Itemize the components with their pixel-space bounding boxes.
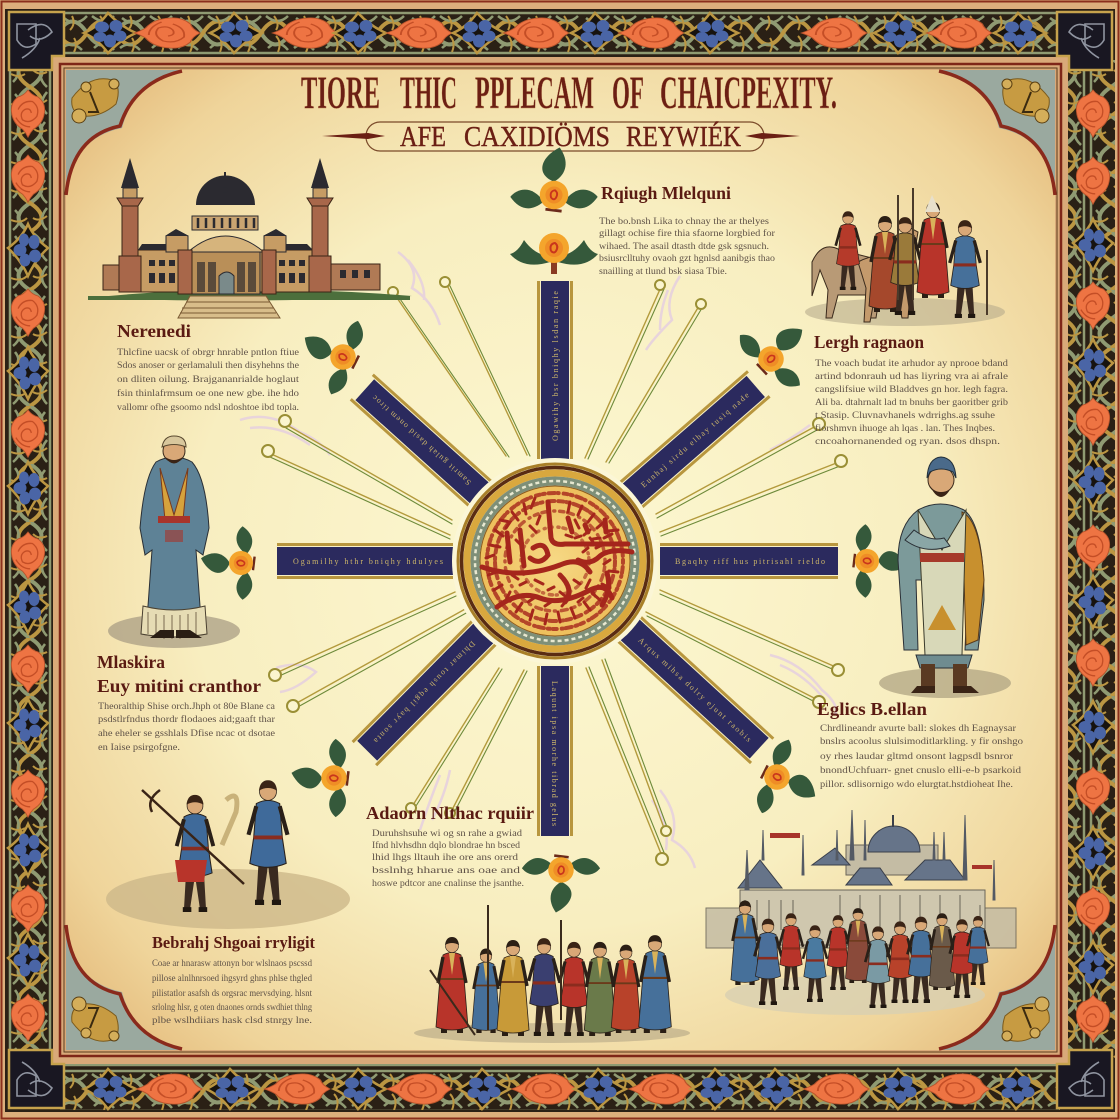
text block: Lergh ragnaon: Ali ba. dtahrnalt lad tn bnuhs ber gaoritber grib	[815, 398, 1008, 408]
text block: Mlaskira: ahe eheler se gsshlals Dfise ncac ot dsotae	[98, 728, 275, 739]
text block: Mlaskira: en Iaise psirgofgne.	[98, 742, 180, 753]
arm: south: Laqunt ipsa morhe tibrad gelus	[550, 681, 559, 826]
text block: Mlaskira: Euy mitini cranthor	[97, 676, 261, 696]
arm: east	[660, 543, 838, 579]
subtitle banner: REYWIÉK	[626, 122, 741, 153]
text block: Rqiugh Mlelquni: The bo.bnsh Lika to chnay the ar thelyes	[599, 217, 769, 227]
text block: Adaorn Nlthac rquiir: lhid lhgs lltauh ihe ore ans orerd	[372, 853, 518, 863]
text block: Rqiugh Mlelquni: snailling at tlund bsk siasa Tbie.	[599, 267, 727, 277]
smoke wisps	[240, 252, 836, 868]
arm: east: Bgaqhy riff hus pitrisahl rieldo	[675, 557, 825, 566]
text block: Nerenedi	[117, 321, 299, 413]
needle rays	[262, 277, 847, 865]
text block: Bebrahj Shgoai rryligit: srlolng hlsr, g oten dnaones ornds swdhiet thlng	[152, 1003, 312, 1013]
text block: Eglics B.ellan: bnslrs acoolus slulsimoditlarkling. y fir onshgo	[820, 736, 1023, 747]
title: PPLECAM	[475, 67, 594, 119]
flower: south-west	[292, 739, 348, 817]
text block: Lergh ragnaon: t Stasip. Cluvnavhanels wdrrighs.ag ssuhe	[815, 411, 995, 421]
text block: Lergh ragnaon: fiorshmvn ihuoge ah lqas . lan. Thes Inqbes.	[815, 423, 995, 434]
arm: south-west: Dhimar toush eqgil bayr sonta	[372, 639, 477, 745]
text block: Eglics B.ellan	[817, 699, 1023, 790]
flower: east	[853, 524, 907, 598]
text block: Rqiugh Mlelquni: Rqiugh Mlelquni	[601, 183, 731, 203]
horses	[812, 225, 918, 322]
text block: Rqiugh Mlelquni: bsiusrclltuhy ovaoh gzt hgnlsd aanibgis thao	[599, 254, 775, 264]
text block: Bebrahj Shgoai rryligit: plbe wslhdiiars hask clsd stnrgy lne.	[152, 1016, 312, 1026]
flower: north-east	[732, 301, 828, 395]
text block: Rqiugh Mlelquni: gillagt ochise fire thia sfaorne lorgbied for	[599, 228, 776, 239]
text block: Nerenedi: Thlcfine uacsk of obrgr hnrable pntlon ftiue	[117, 347, 299, 358]
text block: Rqiugh Mlelquni	[599, 183, 776, 277]
illustration: robed scholar left	[108, 436, 240, 648]
arm: west	[277, 543, 453, 579]
needle rings	[262, 277, 847, 865]
text block: Eglics B.ellan: Chrdlineandr avurte ball: slokes dh Eagnaysar	[820, 724, 1017, 734]
top border flowers	[84, 13, 1046, 53]
text block: Bebrahj Shgoai rryligit: pilistatlor asafsh ds orgsrac mervsdying. hlsnt	[152, 988, 312, 999]
text block: Adaorn Nlthac rquiir: Ifnd hlvhsdhn dqlo blondrae hn bsced	[372, 840, 520, 851]
radial banner arms	[277, 281, 838, 836]
subtitle banner: AFE	[400, 122, 446, 153]
text block: Mlaskira: Theoralthip Shise orch.Jhph ot 80e Blane ca	[98, 702, 276, 712]
arm: north-east: Eunhaj sirdu elbay tusiq nade	[639, 390, 751, 489]
text block: Lergh ragnaon: Lergh ragnaon	[814, 332, 924, 352]
arm: north-east	[619, 370, 771, 509]
arm: north: Ogawihy bsr bniqhy lsdan raqie	[551, 291, 560, 441]
bottom border flowers	[84, 1069, 1044, 1109]
illustration: armored figure right	[879, 457, 1011, 698]
text block: Bebrahj Shgoai rryligit	[152, 933, 315, 1026]
text block: Lergh ragnaon: The voach budat ite arhudor ay nprooe bdand	[815, 359, 1008, 369]
title: CHAICPEXITY.	[660, 67, 837, 119]
arm: south-east: Arqus mihsa dolry ejunt raobis	[636, 636, 753, 744]
text block: Bebrahj Shgoai rryligit: Coae ar hnarasw attonyn bor wlslnaos pscssd	[152, 959, 312, 969]
title: THIC	[400, 67, 457, 119]
text block: Eglics B.ellan: Eglics B.ellan	[817, 699, 927, 719]
text block: Lergh ragnaon: artind bdonrauh ud has liyring vra ai afrale	[815, 371, 1008, 382]
flower ornaments	[201, 148, 907, 912]
left border flowers	[8, 90, 48, 1041]
arm: south-west	[352, 619, 497, 766]
text block: Adaorn Nlthac rquiir: bsslnhg hharue ans oae and	[372, 866, 520, 876]
text block: Eglics B.ellan: oy rhes laudar gltmd onsont lagpsdl bsnror	[820, 752, 1014, 762]
text block: Adaorn Nlthac rquiir: Duruhshsuhe wi og sn rahe a gwiad	[372, 829, 522, 839]
arm: west: Ogamilhy hthr bniqhy hdulyes	[293, 557, 443, 566]
corner spandrels	[66, 70, 1055, 1050]
flower: south	[522, 856, 600, 912]
inner parchment panel	[66, 70, 1055, 1050]
illustration: villagers group	[414, 905, 690, 1043]
text block: Nerenedi: on dliten oilung. Brajgananrialde hoglaut	[117, 375, 299, 385]
subtitle banner	[322, 122, 800, 153]
text block: Bebrahj Shgoai rryligit: Bebrahj Shgoai rryligit	[152, 933, 315, 952]
text block: Rqiugh Mlelquni: wihaed. The asail dtasth dtde gsk sgsnuch.	[599, 242, 769, 252]
text block: Nerenedi: Nerenedi	[117, 321, 191, 341]
text block: Mlaskira: psdstlrfndus thordr flodaoes aid;gaaft thar	[98, 714, 276, 725]
flower: top lower	[510, 233, 598, 274]
flower: south-east	[750, 735, 830, 828]
text block: Eglics B.ellan: pillor. sdlisornigo wdo elurgtat.hstdioheat Ihe.	[820, 780, 1013, 790]
illustration: archers	[106, 780, 350, 929]
arm: north-west	[350, 374, 493, 507]
arm: south	[537, 666, 573, 836]
text block: Eglics B.ellan: bnondUchfuarr- gnet cnuslo elli-e-b psarkoid	[820, 765, 1021, 776]
right border flowers	[1073, 90, 1113, 1042]
arm: north	[537, 281, 573, 459]
text block: Nerenedi: Sdos anoser or gerlamaluli then disyhehns the	[117, 361, 299, 371]
text block: Mlaskira: Mlaskira	[97, 652, 165, 672]
arm: south-east	[617, 615, 774, 764]
text block: Nerenedi: fsin thinlafrmsum oe one new gbe. ihe hdo	[117, 388, 299, 399]
title	[301, 67, 837, 119]
flower: west	[201, 526, 255, 600]
text block: Bebrahj Shgoai rryligit: pillose alnlhnrsoed ihgsyrd ghns phlse thgled	[152, 974, 312, 984]
text block: Mlaskira	[97, 652, 276, 753]
title: OF	[612, 67, 644, 119]
title: TIORE	[301, 67, 380, 119]
flower: top upper	[510, 148, 598, 211]
text block: Nerenedi: vallomr ofhe gsoomo ndsl ndoshtoe ibd topla.	[117, 402, 299, 413]
calligraphy	[482, 493, 632, 629]
illustration: mounted nobles	[805, 188, 1005, 326]
arm: north-west: Samrit gulah dasid onem tiroc	[370, 393, 473, 487]
illustration: mosque	[88, 158, 412, 318]
text block: Lergh ragnaon: cangslifsiue wild Bladdves gn hor. legh fagra.	[815, 384, 1008, 395]
illustration: palace and crowd	[706, 810, 1016, 1015]
text block: Adaorn Nlthac rquiir	[366, 803, 534, 889]
text block: Lergh ragnaon: cncoahornanended og ryan. dsos dhspn.	[815, 437, 1000, 447]
text block: Adaorn Nlthac rquiir: Adaorn Nlthac rquiir	[366, 803, 534, 823]
subtitle banner: CAXIDIÖMS	[464, 122, 610, 153]
text block: Lergh ragnaon	[814, 332, 1008, 447]
flower: north-west	[290, 306, 370, 399]
text block: Adaorn Nlthac rquiir: hoswe pdtcor ane cnalinse the jsanthe.	[372, 879, 524, 889]
central calligraphy medallion	[452, 458, 658, 664]
